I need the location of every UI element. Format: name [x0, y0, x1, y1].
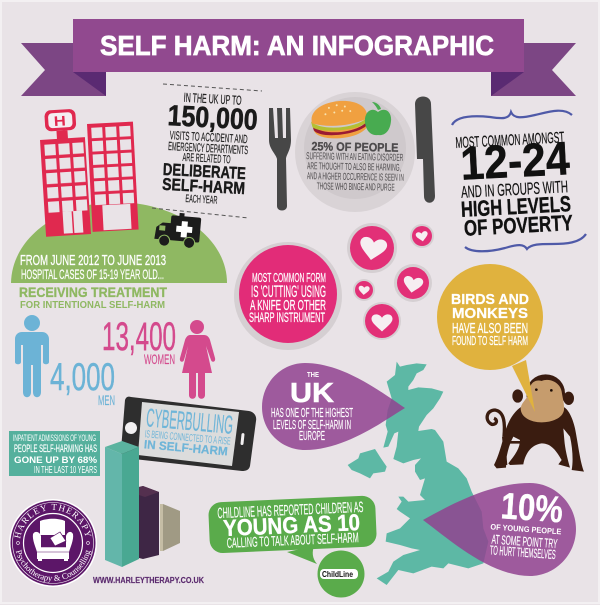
panel: A&E visits: VISITS TO ACCIDENT AND	[169, 128, 248, 146]
text: birds and monkeys: FOUND TO SELF HARM	[452, 333, 528, 348]
icons: hearts	[347, 223, 434, 340]
decorative swirl: top	[452, 111, 572, 125]
decorative swirl: bottom	[465, 234, 586, 251]
text: 25% of people: 25% OF PEOPLE	[311, 139, 399, 155]
text: logo ring: Psychotherapy & Counselling	[16, 550, 92, 582]
panel: inpatient admissions: IN THE LAST 10 YEARS	[34, 464, 97, 476]
text: birds and monkeys: BIRDS AND	[451, 292, 529, 308]
panel: A&E visits: IN THE UK UP TO	[183, 90, 242, 108]
icon: armchair	[33, 519, 73, 561]
logo: Harley Therapy	[9, 499, 97, 587]
icon: ChildLine logo	[318, 550, 364, 598]
panel: ChildLine bubble	[208, 495, 377, 564]
icon: ambulance	[154, 211, 202, 249]
panel: A&E visits: EACH YEAR	[185, 193, 218, 207]
icon: woman	[180, 320, 215, 399]
panel: most common amongst 12-24: 12-24	[459, 131, 571, 190]
panel: cutting circle: IS 'CUTTING' USING	[251, 283, 326, 301]
text: logo ring	[14, 504, 92, 582]
text: cutting: A KNIFE OR OTHER	[250, 297, 326, 314]
panel: A&E visits: EMERGENCY DEPARTMENTS	[168, 139, 248, 157]
stat: 4,000 men: 4,000	[50, 356, 115, 399]
panel: birds and monkeys bubble	[437, 264, 543, 412]
panel: eating disorder plate	[295, 92, 415, 212]
text: hospital cases: RECEIVING TREATMENT	[19, 284, 167, 300]
text: 25% of people: THOSE WHO BINGE AND PURGE	[317, 181, 395, 194]
icon: apple	[365, 102, 391, 135]
stat: 13,400 women	[102, 315, 176, 367]
text: hospital cases	[19, 252, 167, 311]
text: birds and monkeys: HAVE ALSO BEEN	[452, 320, 528, 337]
panel: A&E visits: 150,000	[167, 100, 258, 137]
panel: eating disorder plate: SUFFERING WITH AN EATING DISORDER	[306, 151, 403, 164]
stat: 4,000 men	[50, 356, 115, 408]
panel: inpatient admissions	[9, 431, 100, 476]
panel: 10% bubble	[423, 483, 576, 576]
panel: inpatient admissions: PEOPLE SELF-HARMING HAS	[14, 443, 97, 455]
stat: 4,000 men: MEN	[98, 392, 115, 408]
text: childline: YOUNG AS 10	[223, 509, 361, 541]
icon: monkey	[487, 374, 584, 472]
panel: phone cyberbullying	[121, 397, 256, 471]
map: UK	[348, 362, 488, 585]
text: 10%: 10%	[500, 485, 564, 530]
icon: man	[15, 315, 49, 397]
panel: inpatient admissions: GONE UP BY 68%	[14, 455, 97, 465]
icon: fork	[269, 108, 291, 210]
icon: knife	[415, 96, 435, 203]
text: 25% of people	[306, 139, 405, 194]
text: cutting	[249, 270, 326, 325]
text: birds and monkeys	[451, 292, 529, 348]
text: childline	[217, 499, 365, 551]
text: childline: CALLING TO TALK ABOUT SELF-HARM	[226, 529, 359, 551]
panel: A&E visits	[152, 84, 262, 218]
panel: A&E visits: SELF-HARM	[162, 175, 246, 198]
text: cyberbullying: IN SELF-HARM	[143, 437, 228, 458]
chart: 3D bars	[105, 441, 180, 567]
stat: 13,400 women: WOMEN	[144, 351, 175, 367]
text: logo ring: HARLEY THERAPY	[14, 504, 92, 539]
text: cutting: MOST COMMON FORM	[252, 270, 326, 285]
icon: burger	[309, 99, 369, 141]
icon: ChildLine logo: ChildLine	[322, 570, 353, 579]
text: cyberbullying	[143, 402, 234, 459]
stat: 13,400 women: 13,400	[102, 315, 176, 359]
panel: A&E visits: ARE RELATED TO	[182, 152, 231, 166]
icon: hospital: H	[53, 112, 66, 129]
text: website: WWW.HARLEYTHERAPY.CO.UK	[93, 576, 204, 585]
title banner	[21, 19, 576, 96]
title: SELF HARM: AN INFOGRAPHIC	[100, 30, 494, 61]
text: 25% of people: ARE THOUGHT TO ALSO BE HARMING,	[307, 161, 401, 174]
panel: cutting circle	[234, 242, 342, 350]
text: UK: UK	[290, 377, 334, 408]
text: UK: EUROPE	[299, 428, 325, 443]
text: hospital cases: FROM JUNE 2012 TO JUNE 2013	[20, 252, 166, 269]
green hill	[11, 202, 227, 283]
panel: most common amongst 12-24	[452, 111, 586, 251]
text: 10%	[488, 485, 565, 562]
panel: UK bubble	[262, 363, 405, 450]
text: hospital cases: FOR INTENTIONAL SELF-HARM	[20, 299, 165, 311]
text: UK	[271, 370, 353, 443]
panel: ChildLine bubble: CHILDLINE HAS REPORTED CHILDREN AS	[217, 499, 364, 522]
panel: UK bubble: LEVELS OF SELF-HARM IN	[273, 417, 351, 432]
text: hospital cases: HOSPITAL CASES OF 15-19 YEAR OLD...	[21, 266, 164, 282]
text: 10%: OF YOUNG PEOPLE	[490, 522, 562, 536]
panel: phone cyberbullying: CYBERBULLING	[145, 402, 234, 440]
text: UK: THE	[307, 370, 319, 379]
panel: UK bubble: HAS ONE OF THE HIGHEST	[271, 405, 353, 420]
text: birds and monkeys: MONKEYS	[452, 306, 528, 322]
panel: inpatient admissions: INPATIENT ADMISSIONS OF YOUNG	[13, 433, 96, 444]
panel: A&E visits: DELIBERATE	[162, 160, 246, 183]
panel: eating disorder plate: AND A HIGHER OCCURRENCE IS SEEN IN	[307, 171, 404, 184]
icon: hospital	[38, 108, 139, 237]
text: cyberbullying: IS BEING CONNECTED TO A RISE	[144, 428, 231, 448]
text: cutting: SHARP INSTRUMENT	[249, 309, 325, 325]
